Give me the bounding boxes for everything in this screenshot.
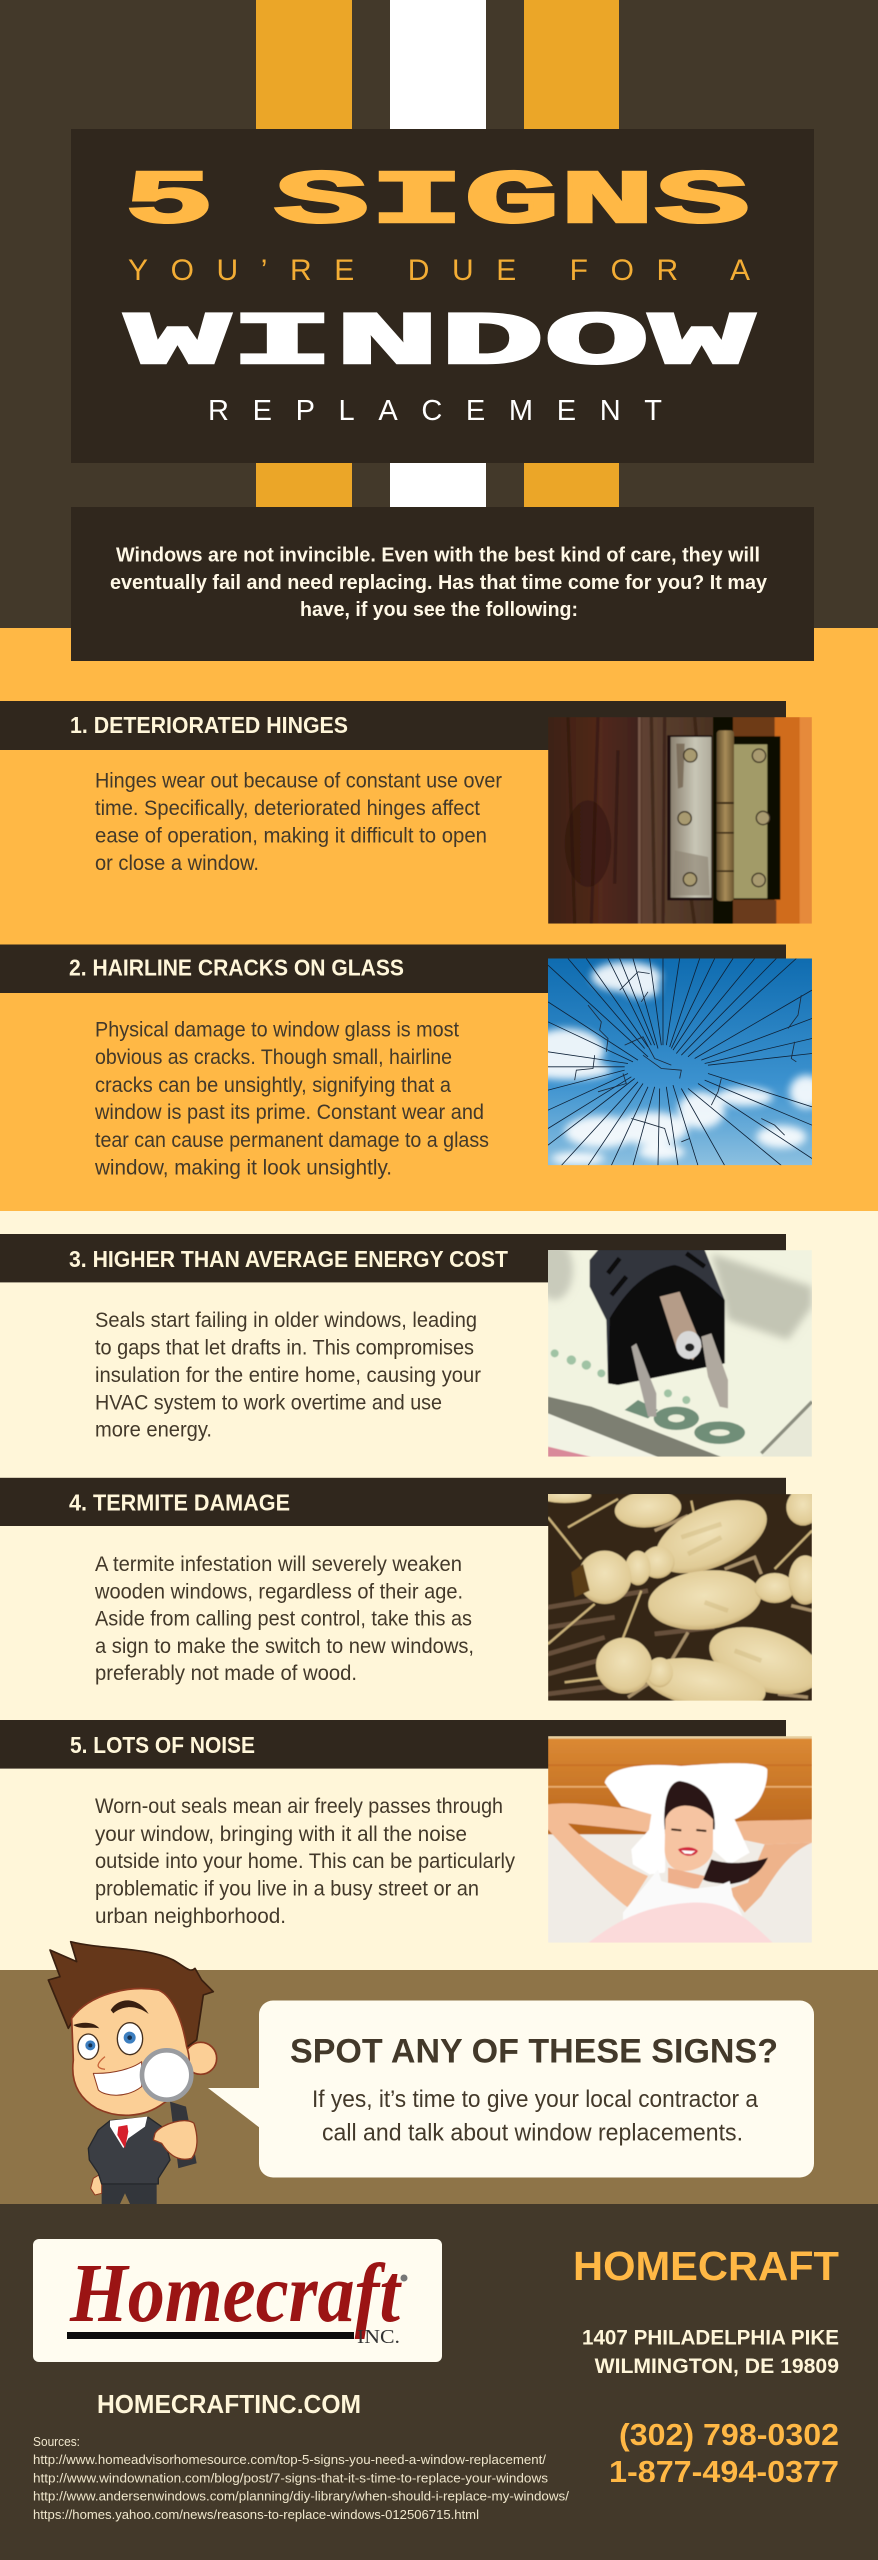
intro text: have, if you see the following:: [300, 598, 578, 621]
panel: sign 5 lots of noise: [0, 1720, 812, 1943]
body text 1: time. Specifically, deteriorated hinges affect: [95, 797, 480, 820]
photo: termites: [548, 1494, 812, 1701]
logo underline: [67, 2332, 354, 2339]
body text 1: or close a window.: [95, 852, 259, 875]
subtitle: you're due for a: YOU’RE DUE FOR A: [128, 254, 750, 287]
speech bubble: [208, 2000, 814, 2178]
body text 4: [94, 1553, 474, 1685]
logo wordmark: Homecraft: [69, 2247, 402, 2340]
address: 1407 PHILADELPHIA PIKE: [582, 2326, 839, 2350]
body text 5: outside into your home. This can be particularly: [95, 1850, 515, 1873]
phone numbers: 1-877-494-0377: [609, 2454, 839, 2489]
logo card: [33, 2239, 442, 2362]
body text 4: wooden windows, regardless of their age.: [94, 1580, 463, 1603]
panel: sign 3 energy cost: [0, 1234, 812, 1457]
body text 3: to gaps that let drafts in. This compromises: [95, 1337, 474, 1360]
body text 1: Hinges wear out because of constant use over: [95, 769, 502, 792]
body text 3: insulation for the entire home, causing your: [95, 1364, 481, 1387]
photo: rusty hinge: [548, 717, 812, 924]
intro panel: [71, 507, 814, 661]
bubble text: [312, 2086, 758, 2146]
title: 5 signs: 5: [124, 159, 214, 245]
panel: footer: [0, 2204, 878, 2560]
header background: [0, 0, 878, 628]
panel: sign 2 hairline cracks: [0, 944, 823, 1180]
body text 2: cracks can be unsightly, signifying that a: [95, 1074, 451, 1097]
body text 2: window, making it look unsightly.: [94, 1156, 392, 1180]
sources: http://www.andersenwindows.com/planning/diy-library/when-should-i-replace-my-windows/: [33, 2490, 570, 2504]
photo: woman covering ears with pillow: [548, 1736, 812, 1943]
body text 4: preferably not made of wood.: [95, 1662, 357, 1685]
body text 2: window is past its prime. Constant wear and: [94, 1101, 484, 1124]
body text 5: Worn-out seals mean air freely passes through: [95, 1795, 503, 1818]
bubble heading: SPOT ANY OF THESE SIGNS?: [290, 2033, 778, 2071]
sources: [33, 2435, 570, 2522]
photo: plug on dollar bill: [536, 1240, 812, 1457]
address: WILMINGTON, DE 19809: [595, 2355, 839, 2378]
website: HOMECRAFTINC.COM: [97, 2389, 361, 2419]
photo: cracked glass: [548, 958, 812, 1166]
heading 5: 5. LOTS OF NOISE: [70, 1732, 255, 1758]
heading 2: 2. HAIRLINE CRACKS ON GLASS: [69, 954, 404, 980]
body text 3: [95, 1309, 481, 1442]
bubble text: call and talk about window replacements.: [322, 2120, 743, 2146]
title: 5 signs: SIGNS: [274, 159, 750, 245]
heading 1: 1. DETERIORATED HINGES: [70, 712, 348, 738]
intro text: [110, 544, 768, 621]
body text 5: your window, bringing with it all the noise: [95, 1823, 467, 1846]
body text 5: problematic if you live in a busy street or an: [95, 1878, 479, 1901]
panel: sign 1 deteriorated hinges: [0, 701, 812, 924]
intro text: eventually fail and need replacing. Has that time come for you? It may: [110, 571, 768, 594]
body text 2: tear can cause permanent damage to a glass: [95, 1129, 489, 1152]
sources: Sources:: [33, 2435, 80, 2449]
panel: sign 4 termite damage: [0, 1478, 828, 1718]
body text 4: a sign to make the switch to new windows,: [95, 1635, 474, 1658]
body text 5: urban neighborhood.: [95, 1905, 286, 1928]
body text 5: [95, 1795, 515, 1928]
phone numbers: (302) 798-0302: [619, 2417, 839, 2452]
panel: call to action band: [0, 1970, 878, 2204]
body text 1: [95, 769, 502, 875]
body text 2: obvious as cracks. Though small, hairline: [95, 1046, 452, 1069]
sources: http://www.windownation.com/blog/post/7-signs-that-it-s-time-to-replace-your-windows: [33, 2472, 548, 2486]
intro text: Windows are not invincible. Even with the best kind of care, they will: [116, 544, 760, 566]
address: [582, 2326, 839, 2378]
logo inc: INC.: [357, 2326, 400, 2348]
illustration: cartoon businessman with magnifier: [48, 1942, 217, 2204]
bubble text: If yes, it’s time to give your local contractor a: [312, 2086, 758, 2113]
sources: http://www.homeadvisorhomesource.com/top-5-signs-you-need-a-window-replacement/: [33, 2453, 547, 2467]
phone numbers: [609, 2417, 839, 2489]
body text 2: [94, 1019, 489, 1180]
body text 4: A termite infestation will severely weaken: [95, 1553, 462, 1576]
title: window: WINDOW: [125, 301, 754, 386]
header stripes: [256, 0, 619, 507]
title: 5 signs: [124, 159, 750, 245]
body text 3: more energy.: [95, 1418, 212, 1442]
body text 3: HVAC system to work overtime and use: [95, 1391, 442, 1414]
subtitle: replacement: REPLACEMENT: [208, 395, 662, 427]
body text 3: Seals start failing in older windows, leading: [95, 1309, 477, 1332]
sources: https://homes.yahoo.com/news/reasons-to-replace-windows-012506715.html: [33, 2508, 479, 2522]
cream section background: [0, 1211, 878, 1970]
heading 3: 3. HIGHER THAN AVERAGE ENERGY COST: [69, 1246, 508, 1272]
title panel: [71, 129, 814, 463]
heading 4: 4. TERMITE DAMAGE: [69, 1490, 290, 1516]
body text 2: Physical damage to window glass is most: [95, 1019, 459, 1042]
body text 4: Aside from calling pest control, take this as: [95, 1608, 472, 1631]
logo registered mark: [400, 2274, 408, 2282]
body text 1: ease of operation, making it difficult to open: [95, 824, 487, 848]
yellow section background: [0, 628, 878, 1211]
company name: HOMECRAFT: [573, 2243, 839, 2289]
